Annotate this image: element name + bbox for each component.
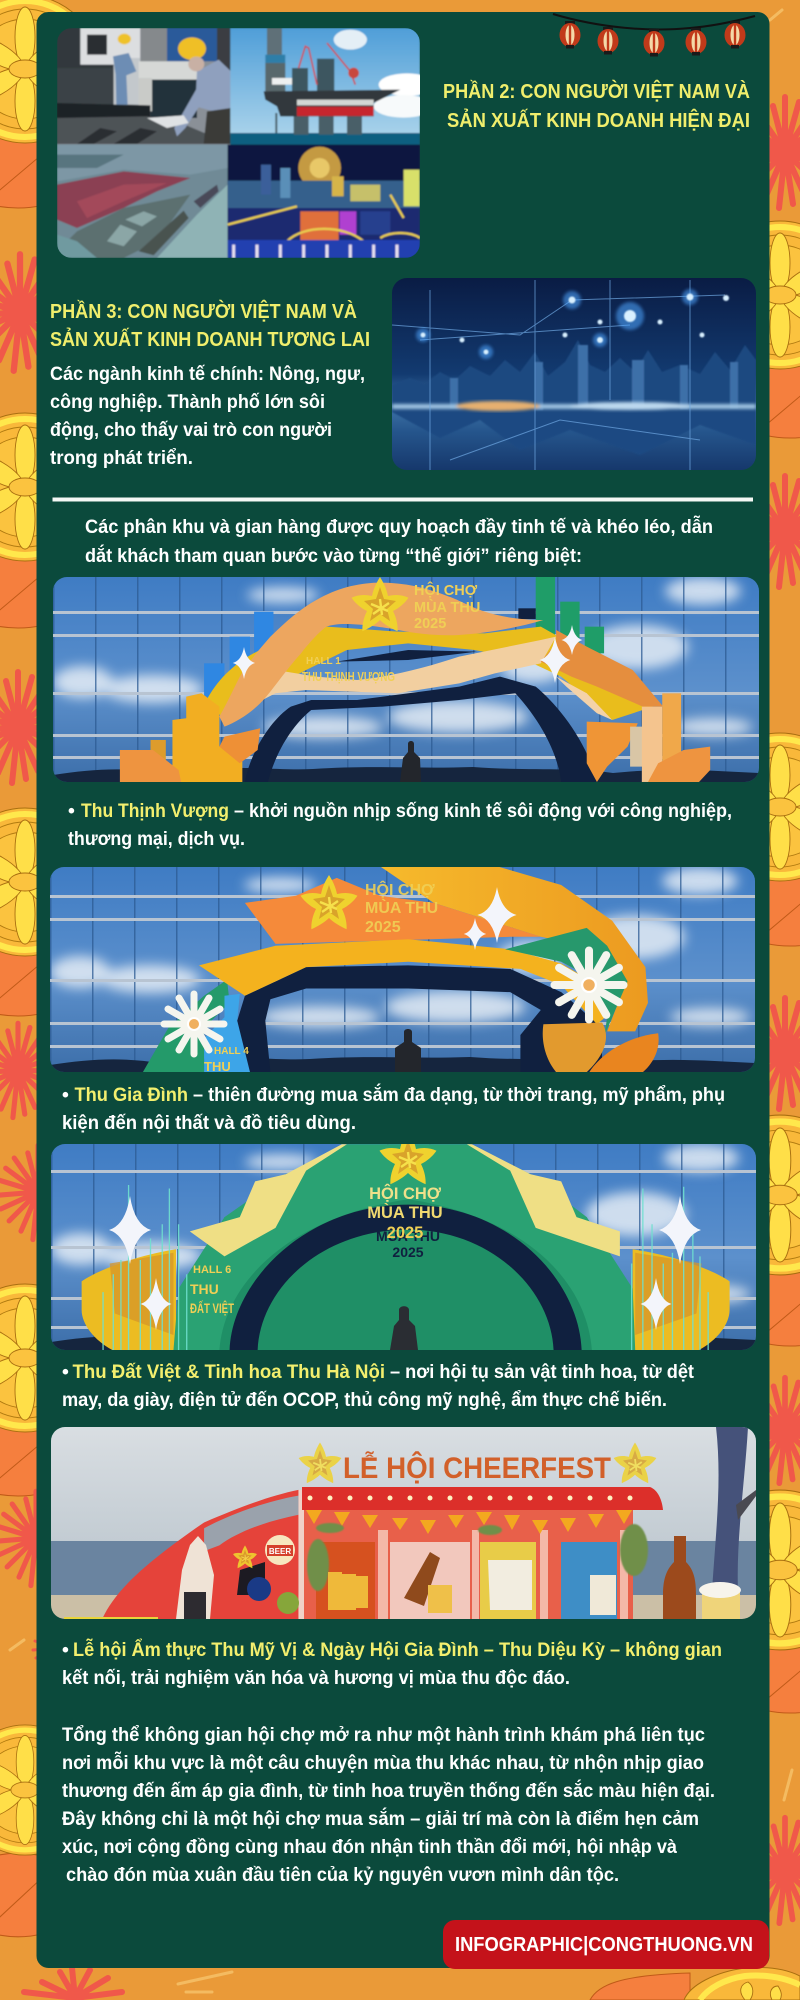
left buildings [172,693,242,782]
text: Thu Thinh Vuong: thương mại, dịch vụ. [68,828,245,850]
photo: Cheerfest festival train [51,1427,756,1619]
text block: closing paragraph: thương đến ấm áp gia đình, từ tinh hoa truyền thống đến sắc màu hiện đại. [62,1778,715,1802]
woman figure [176,1536,214,1619]
text block: closing paragraph [62,1724,715,1886]
gate structure [82,1144,730,1350]
text block: closing paragraph: nơi mỗi khu vực là một câu chuyện mùa thu khác nhau, từ nhộn nhịp giao [62,1750,704,1774]
text: food festival: • [62,1639,69,1661]
text: Thu Thinh Vuong: • [68,800,75,822]
text: Thu Thinh Vuong [68,800,732,850]
text: Thu Thinh Vuong: – khởi nguồn nhịp sống kinh tế sôi động với công nghiệp, [234,800,732,822]
hall label: THU [190,1281,219,1297]
text: Thu Dat Viet and Tinh hoa Thu Ha Noi: Thu Đất Việt & Tinh hoa Thu Hà Nội [72,1361,385,1383]
text block: closing paragraph: Đây không chỉ là một hội chợ mua sắm – giải trí mà còn là điểm hẹn cảm [62,1806,699,1830]
festival title: LỄ HỘI CHEERFEST [343,1451,611,1485]
right buildings [587,722,638,782]
text block: closing paragraph: xúc, nơi cộng đồng cùng nhau đón nhận tinh thần đổi mới, hội nhập và [62,1836,677,1858]
gate title: HỘI CHỢ [365,880,435,899]
beer mug [699,1582,741,1619]
gate title: 2025 [414,616,446,632]
festival booth [302,1487,663,1619]
text: food festival: kết nối, trải nghiệm văn hóa và hương vị mùa thu độc đáo. [62,1667,570,1689]
text: Thu Gia Dinh: • [62,1084,69,1106]
factory photo [57,28,231,145]
event logo [352,577,408,631]
text block: main economic sectors: Các ngành kinh tế chính: Nông, ngư, [50,363,365,385]
hall label [190,1264,234,1316]
text block: main economic sectors: trong phát triển. [50,447,193,469]
oil rig photo [230,28,435,145]
text: Thu Gia Dinh: Thu Gia Đình [74,1084,188,1106]
text: Thu Thinh Vuong: Thu Thịnh Vượng [81,800,229,822]
intro text: dắt khách tham quan bước vào từng “thế giới” riêng biệt: [85,543,582,567]
gate title [302,581,480,684]
gate title [367,1184,443,1260]
figure [395,1029,421,1072]
gate structure [120,577,710,782]
gate title: 2025 [365,919,401,936]
text block: main economic sectors [50,363,365,469]
text: Thu Gia Dinh: – thiên đường mua sắm đa dạng, từ thời trang, mỹ phẩm, phụ [193,1082,725,1106]
text: food festival: Lễ hội Ẩm thực Thu Mỹ Vị & Ngày Hội Gia Đình – Thu Diệu Kỳ – không gian [73,1637,722,1661]
source badge [443,1920,769,1969]
gate title: THU THỊNH VƯỢNG [302,669,395,684]
photo: Thu Dat Viet gate [51,1130,757,1350]
gate title: MÙA THU [367,1203,443,1222]
gate title: THU [204,1059,231,1074]
container port photo [57,145,228,258]
intro text: Các phân khu và gian hàng được quy hoạch đầy tinh tế và khéo léo, dẫn [85,514,713,538]
gate title: 2025 [387,1224,423,1242]
gate title: HỘI CHỢ [414,581,478,599]
gate title: HALL 4 [214,1046,249,1057]
beer badges [233,1535,299,1614]
heading: part 2: SẢN XUẤT KINH DOANH HIỆN ĐẠI [447,108,750,132]
heading: part 2 [443,79,750,132]
text block: main economic sectors: động, cho thấy vai trò con người [50,419,332,441]
photo: Thu Thinh Vuong gate [53,577,759,783]
gate title [204,880,438,1074]
photo collage: industry, oil rig, port, city [57,28,435,258]
text: Thu Dat Viet and Tinh hoa Thu Ha Noi: • [62,1361,69,1383]
gate title: MÙA THU [414,598,480,616]
train [102,1490,306,1619]
text: Thu Dat Viet and Tinh hoa Thu Ha Noi: may, da giày, điện tử đến OCOP, thủ công mỹ nghệ, ẩm thực chế biến. [62,1389,667,1411]
text: Thu Dat Viet and Tinh hoa Thu Ha Noi [62,1361,694,1411]
gate title: 2025 [392,1244,424,1260]
text: food festival [62,1637,722,1689]
gate structure [143,866,659,1072]
beer badges: BEER [269,1547,291,1556]
text: Thu Dat Viet and Tinh hoa Thu Ha Noi: – nơi hội tụ sản vật tinh hoa, từ dệt [390,1361,694,1383]
heading: part 3 [50,299,370,351]
beer bottle [663,1536,696,1619]
tree [712,1427,748,1591]
night city photo [228,145,420,258]
gate title: MÙA THU [376,1227,440,1244]
text block: main economic sectors: công nghiệp. Thành phố lớn sôi [50,391,325,413]
photo: futuristic network city [392,278,756,470]
text block: closing paragraph: Tổng thể không gian hội chợ mở ra như một hành trình khám phá liên tục [62,1724,705,1746]
figure [390,1306,418,1350]
intro text [85,514,713,567]
text: Thu Gia Dinh [62,1082,725,1134]
source badge: INFOGRAPHIC|CONGTHUONG.VN [455,1934,753,1956]
gate title: MÙA THU [365,898,438,917]
gate title: HALL 1 [306,656,341,667]
text: Thu Gia Dinh: kiện đến nội thất và đồ tiêu dùng. [62,1112,356,1134]
figure [400,741,421,782]
heading: part 3: SẢN XUẤT KINH DOANH TƯƠNG LAI [50,328,370,351]
heading: part 3: PHẦN 3: CON NGƯỜI VIỆT NAM VÀ [50,299,357,323]
hall label: HALL 6 [193,1264,231,1276]
hall label: ĐẤT VIỆT [190,1299,234,1316]
heading: part 2: PHẦN 2: CON NGƯỜI VIỆT NAM VÀ [443,79,750,103]
gate title: HỘI CHỢ [369,1184,442,1203]
text block: closing paragraph: chào đón mùa xuân đầu tiên của kỷ nguyên vươn mình dân tộc. [66,1864,619,1886]
photo: Thu Gia Dinh gate [50,866,756,1074]
icon: string of lanterns [553,14,755,56]
